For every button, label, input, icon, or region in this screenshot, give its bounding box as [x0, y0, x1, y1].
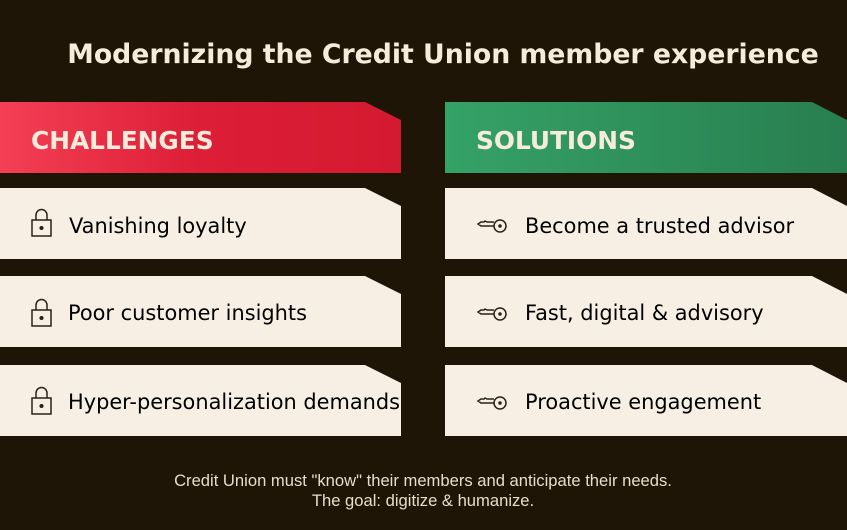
title: Modernizing the Credit Union member experience: [67, 39, 819, 70]
panel: solutions header: SOLUTIONS: [476, 126, 636, 155]
icon: lock: [32, 388, 51, 414]
panel: challenges header: [0, 102, 401, 173]
challenge: vanishing loyalty: [0, 188, 401, 259]
challenge: vanishing loyalty: Vanishing loyalty: [69, 214, 247, 238]
solution: fast digital: [445, 276, 847, 347]
solution: trusted advisor: Become a trusted advisor: [525, 214, 794, 238]
challenge: poor customer insights: Poor customer insights: [68, 301, 307, 325]
solution: proactive engagement: [445, 365, 847, 436]
footer text: The goal: digitize & humanize.: [312, 491, 534, 510]
panel: solutions header: [445, 102, 847, 173]
challenge: poor customer insights: [0, 276, 401, 347]
icon: lock: [32, 300, 51, 326]
challenge: hyper-personalization: Hyper-personalization demands: [68, 390, 400, 414]
solution: fast digital: Fast, digital & advisory: [525, 301, 764, 325]
footer text: Credit Union must "know" their members and anticipate their needs.: [174, 471, 672, 490]
icon: key: [478, 220, 506, 232]
icon: key: [478, 308, 506, 320]
icon: key: [478, 397, 506, 409]
solution: proactive engagement: Proactive engagement: [525, 390, 761, 414]
solution: trusted advisor: [445, 188, 847, 259]
challenge: hyper-personalization: [0, 365, 401, 436]
footer text: [174, 471, 672, 510]
icon: lock: [32, 210, 51, 236]
panel: challenges header: CHALLENGES: [31, 126, 214, 155]
